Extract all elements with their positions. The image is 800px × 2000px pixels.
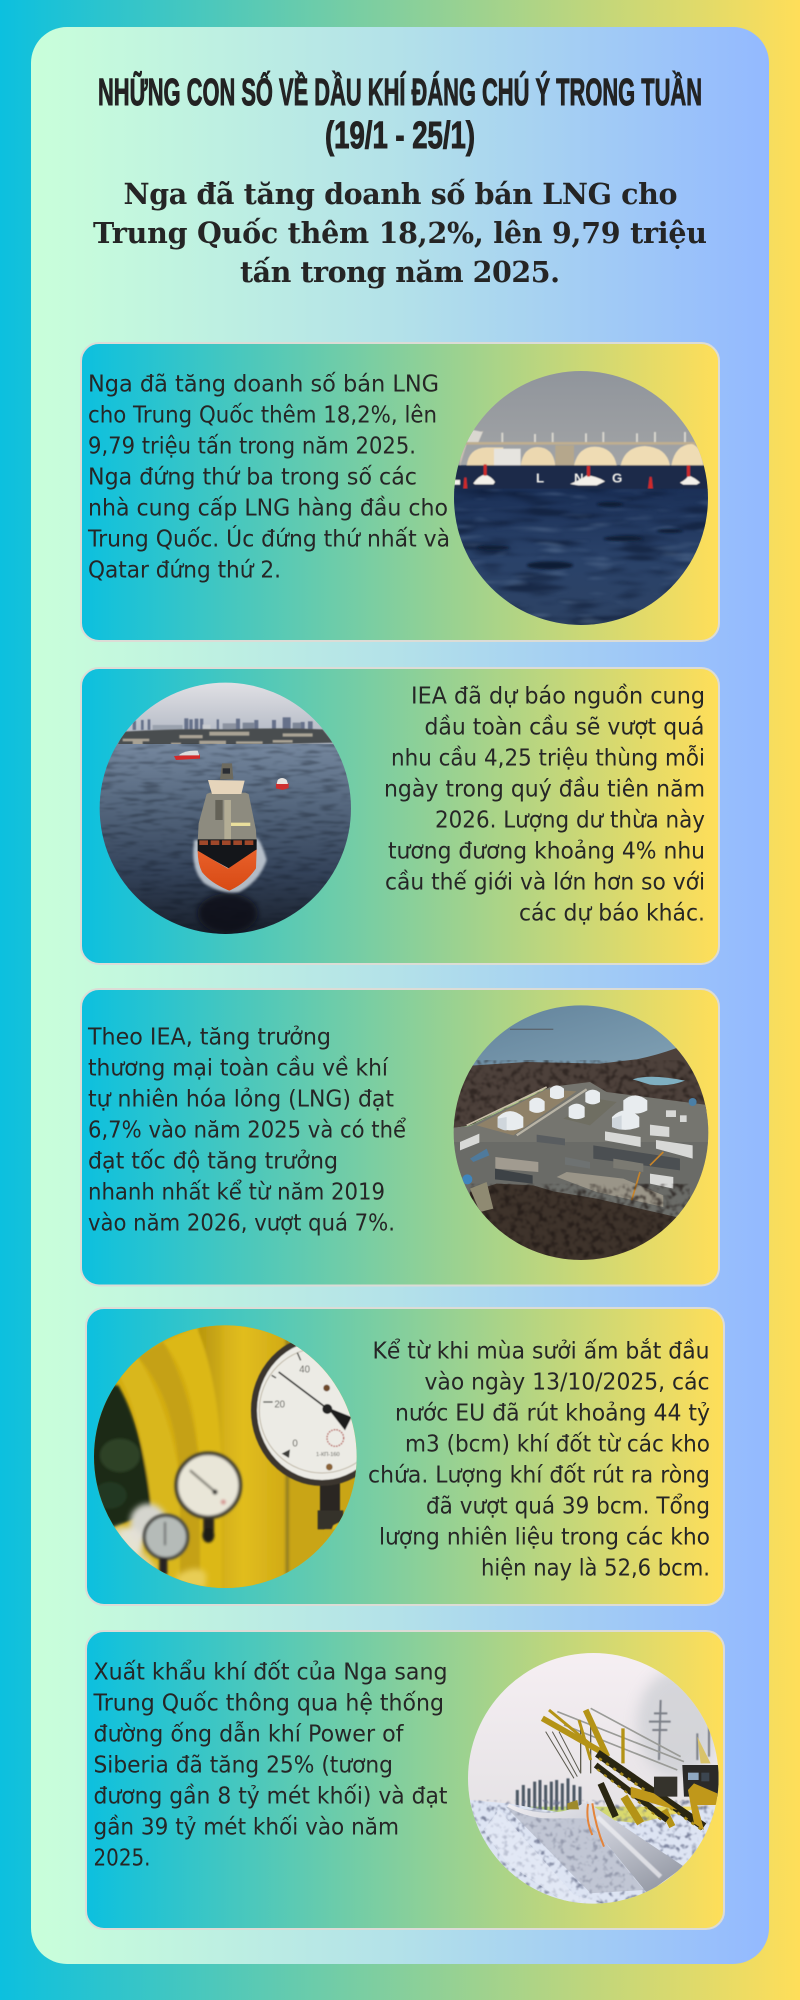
text block: card 1: Trung Quốc. Úc đứng thứ nhất và — [87, 524, 450, 552]
text block: card 4: Kể từ khi mùa sưởi ấm bắt đầu — [372, 1338, 710, 1364]
subtitle: Trung Quốc thêm 18,2%, lên 9,79 triệu — [93, 216, 707, 250]
text block: card 5: 2025. — [94, 1846, 150, 1872]
text block: card 3: tự nhiên hóa lỏng (LNG) đạt — [88, 1086, 394, 1112]
panel: card 1 LNG sales — [81, 343, 719, 641]
text block: card 2: 2026. Lượng dư thừa này — [435, 808, 705, 834]
text block: card 1: cho Trung Quốc thêm 18,2%, lên — [88, 402, 437, 428]
image: oil tanker with city skyline — [96, 680, 356, 941]
text block: card 1: Nga đã tăng doanh số bán LNG — [88, 372, 439, 398]
text block: card 3: vào năm 2026, vượt quá 7%. — [88, 1210, 395, 1236]
text block: card 5 — [93, 1660, 447, 1872]
text block: card 4: lượng nhiên liệu trong các kho — [379, 1524, 710, 1550]
image: pressure gauges and yellow pipes: 20 — [274, 1399, 285, 1410]
text block: card 4: vào ngày 13/10/2025, các — [424, 1370, 710, 1396]
text block: card 5: Trung Quốc thông qua hệ thống — [93, 1690, 444, 1716]
title: (19/1 - 25/1) — [325, 115, 475, 157]
text block: card 2 — [384, 684, 705, 926]
subtitle — [93, 177, 707, 289]
panel: card 3 LNG trade growth — [81, 989, 719, 1286]
text block: card 2: nhu cầu 4,25 triệu thùng mỗi — [391, 744, 705, 772]
image: LNG tanker on the sea: N — [574, 470, 584, 485]
subtitle: Nga đã tăng doanh số bán LNG cho — [124, 177, 678, 211]
text block: card 4: đã vượt quá 39 bcm. Tổng — [426, 1494, 710, 1520]
text block: card 1: nhà cung cấp LNG hàng đầu cho — [88, 496, 448, 522]
text block: card 3 — [87, 1024, 406, 1236]
text block: card 2: các dự báo khác. — [519, 900, 705, 926]
image: pressure gauges and yellow pipes: 1-КП-160 — [316, 1452, 340, 1458]
text block: card 4 — [368, 1338, 710, 1582]
text block: card 4: hiện nay là 52,6 bcm. — [481, 1556, 710, 1582]
text block: card 4: chứa. Lượng khí đốt rút ra ròng — [368, 1462, 710, 1488]
title — [98, 69, 702, 157]
text block: card 1 — [87, 372, 450, 584]
text block: card 3: Theo IEA, tăng trưởng — [87, 1024, 331, 1050]
image: pressure gauges and yellow pipes: 40 — [299, 1365, 310, 1376]
text block: card 2: dầu toàn cầu sẽ vượt quá — [424, 714, 704, 740]
text block: card 3: 6,7% vào năm 2025 và có thể — [88, 1118, 406, 1144]
image: pipeline construction in snow — [464, 1650, 722, 1908]
image: pressure gauges and yellow pipes: 0 — [292, 1439, 298, 1450]
text block: card 2: ngày trong quý đầu tiên năm — [384, 776, 705, 802]
panel: card 4 EU gas storage — [86, 1308, 724, 1605]
panel: card 2 oil supply forecast — [81, 668, 719, 964]
image: pressure gauges and yellow pipes — [94, 1325, 357, 1588]
text block: card 2: tương đương khoảng 4% nhu — [388, 838, 705, 864]
text block: card 3: nhanh nhất kể từ năm 2019 — [88, 1180, 385, 1206]
text block: card 1: Qatar đứng thứ 2. — [88, 558, 281, 584]
text block: card 5: đương gần 8 tỷ mét khối) và đạt — [94, 1784, 448, 1810]
text block: card 5: gần 39 tỷ mét khối vào năm — [94, 1814, 399, 1840]
text block: card 4: m3 (bcm) khí đốt từ các kho — [405, 1432, 710, 1458]
text block: card 5: Siberia đã tăng 25% (tương — [94, 1752, 393, 1778]
text block: card 2: IEA đã dự báo nguồn cung — [411, 684, 705, 710]
text block: card 3: thương mại toàn cầu về khí — [88, 1056, 389, 1082]
subtitle: tấn trong năm 2025. — [240, 255, 560, 289]
image: aerial view of LNG terminal — [450, 1002, 712, 1265]
text block: card 1: Nga đứng thứ ba trong số các — [88, 464, 417, 490]
image: LNG tanker on the sea — [450, 366, 712, 629]
panel: card 5 Power of Siberia — [86, 1631, 724, 1929]
image: LNG tanker on the sea: G — [612, 470, 622, 485]
text block: card 5: đường ống dẫn khí Power of — [94, 1720, 404, 1748]
text block: card 5: Xuất khẩu khí đốt của Nga sang — [94, 1660, 448, 1686]
text block: card 1: 9,79 triệu tấn trong năm 2025. — [88, 434, 416, 460]
text block: card 3: đạt tốc độ tăng trưởng — [88, 1148, 338, 1174]
text block: card 2: cầu thế giới và lớn hơn so với — [385, 870, 705, 896]
text block: card 4: nước EU đã rút khoảng 44 tỷ — [395, 1400, 710, 1426]
image: LNG tanker on the sea: L — [536, 470, 544, 485]
